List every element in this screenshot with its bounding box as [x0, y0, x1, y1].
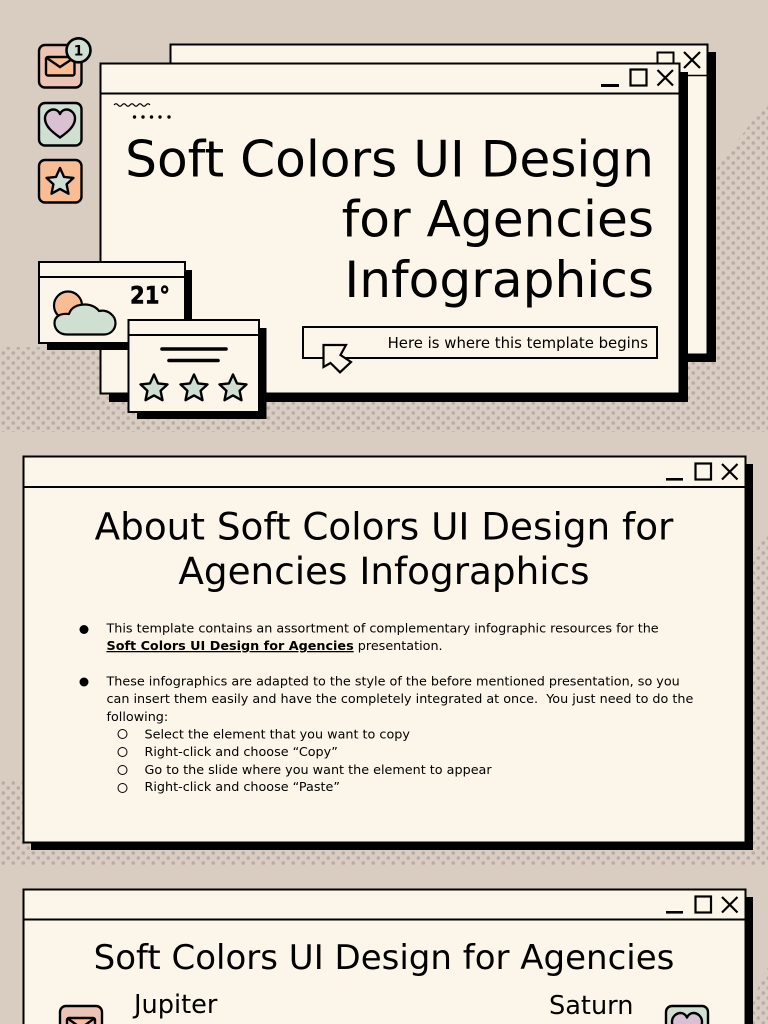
- main window: [100, 64, 688, 402]
- badge: 1: [74, 44, 83, 60]
- icon: cursor arrow: [324, 345, 351, 372]
- panel: infographic: [23, 890, 753, 1024]
- bullet list: [80, 622, 694, 795]
- heading: About Soft Colors UI Design for: [95, 504, 674, 548]
- temperature: 21°: [130, 282, 170, 310]
- rating window: [128, 320, 266, 419]
- heading: Agencies Infographics: [178, 549, 590, 593]
- stars: [140, 374, 246, 400]
- icon: mail: [39, 38, 90, 88]
- icon: heart: [39, 103, 82, 146]
- dots decoration: [133, 115, 171, 119]
- bullet list: These infographics are adapted to the style of the before mentioned presentation, so you: [106, 674, 680, 690]
- bullet list: can insert them easily and have the completely integrated at once. You just need to do the: [106, 692, 694, 707]
- window controls: [601, 70, 673, 87]
- text lines: [162, 349, 226, 360]
- weather window: [39, 262, 192, 350]
- window controls: [666, 464, 738, 481]
- label: Jupiter: Jupiter: [132, 990, 218, 1020]
- dotted texture: slide 2: [0, 530, 768, 866]
- title: Soft Colors UI Design: [125, 130, 654, 188]
- panel: about: [23, 456, 753, 850]
- heading: Soft Colors UI Design for Agencies: [94, 938, 674, 978]
- bullet list: Soft Colors UI Design for Agencies presentation.: [106, 639, 443, 654]
- bullet list: Right-click and choose “Copy”: [144, 745, 338, 760]
- title: [125, 130, 654, 309]
- bullet list: Select the element that you want to copy: [144, 728, 410, 742]
- icon: mail: [60, 1006, 102, 1024]
- bullet list: Go to the slide where you want the element to appear: [144, 763, 492, 778]
- bullet list: Right-click and choose “Paste”: [144, 780, 340, 795]
- title: for Agencies: [342, 190, 654, 248]
- icon: heart: [666, 1006, 708, 1024]
- dotted texture: slide 3: [752, 967, 768, 1024]
- icon: star: [39, 160, 82, 202]
- window controls: [666, 896, 738, 914]
- icon: sun and cloud: [54, 292, 116, 334]
- bullet list: following:: [106, 710, 168, 725]
- heading: [95, 504, 674, 593]
- label: Saturn: Saturn: [549, 991, 633, 1021]
- subtitle box: Here is where this template begins: [388, 334, 648, 352]
- bullet list: This template contains an assortment of complementary infographic resources for the: [106, 622, 659, 636]
- squiggle decoration: [114, 104, 150, 106]
- subtitle box: [303, 327, 657, 358]
- back window: [170, 44, 716, 362]
- dotted texture: slide 1: [0, 100, 768, 432]
- title: Infographics: [344, 250, 654, 309]
